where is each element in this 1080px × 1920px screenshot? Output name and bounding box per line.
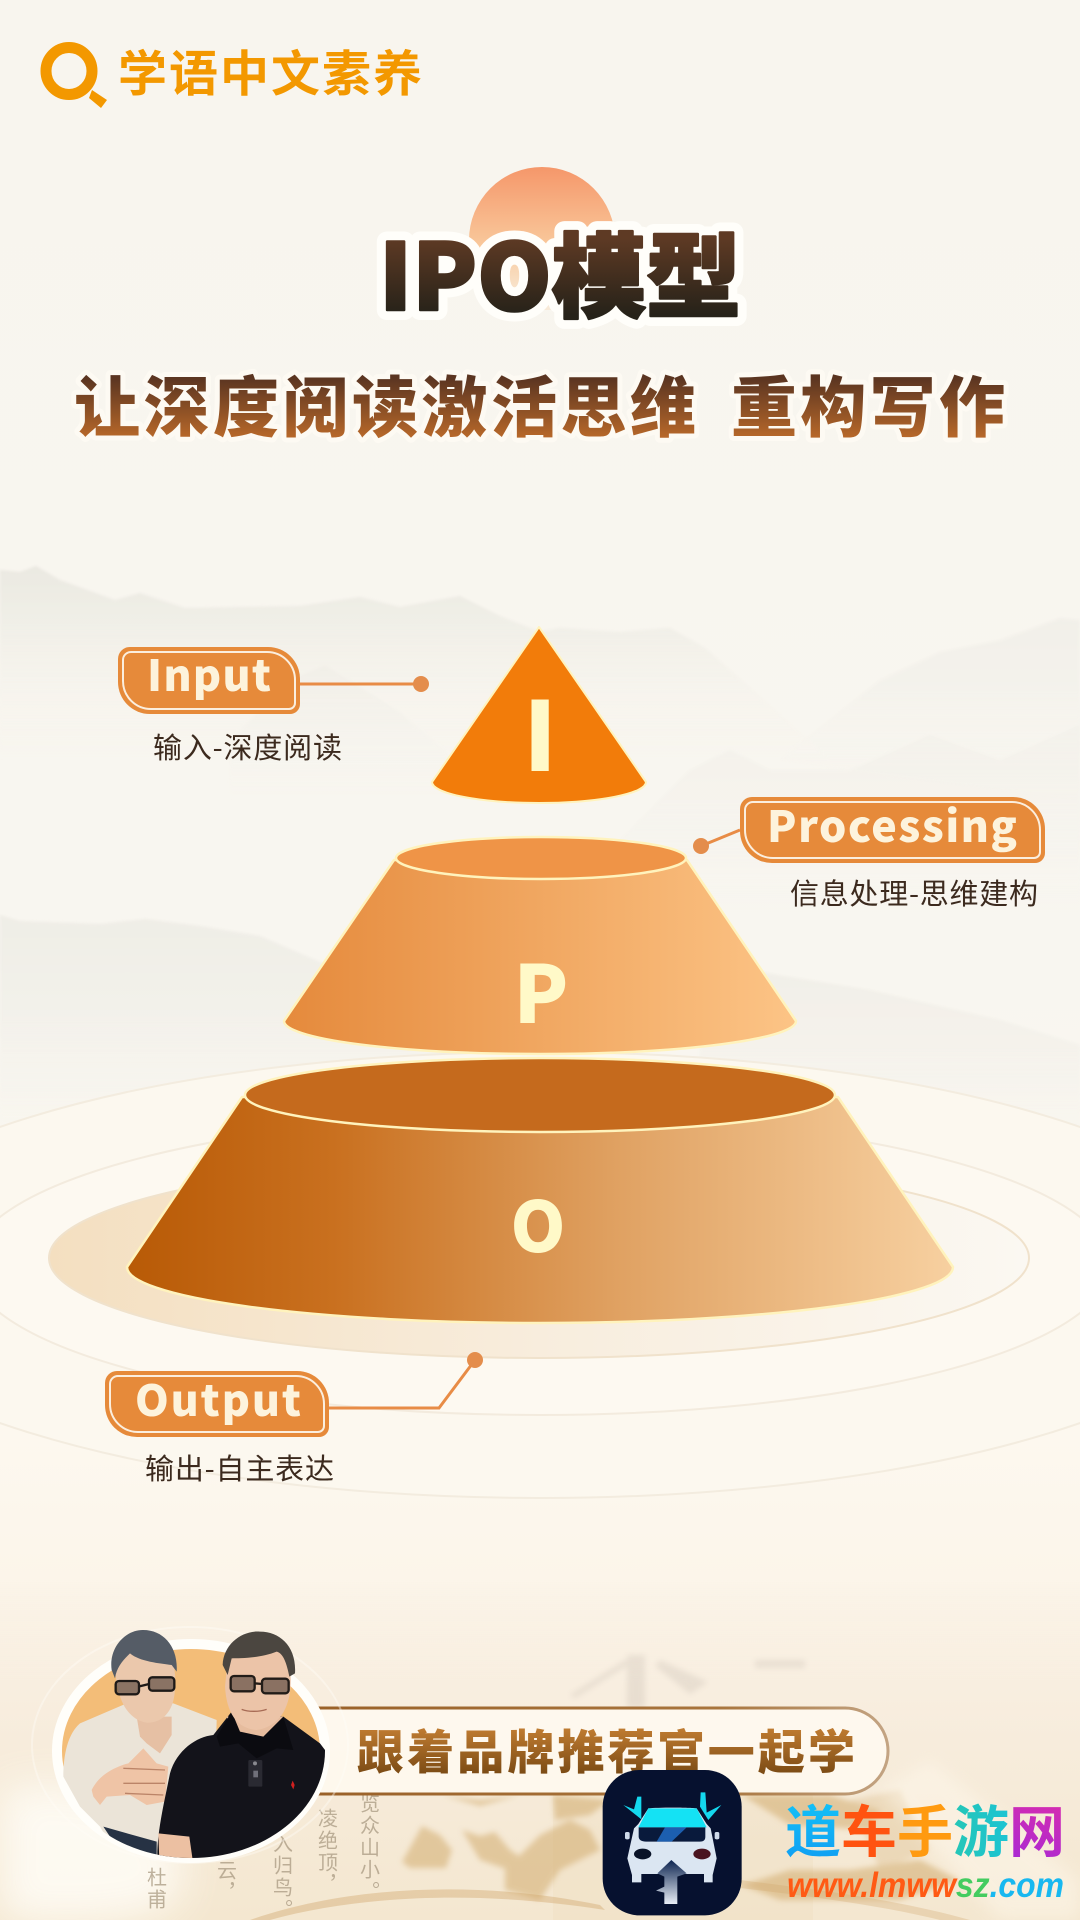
- callout: Processing: 信息处理-思维建构: [790, 871, 1038, 913]
- site watermark: 道车手游网: [785, 1788, 1065, 1869]
- callout: Output: Output: [135, 1367, 301, 1429]
- callout: Processing: Processing: [767, 793, 1017, 855]
- layer P: processing frustum: [284, 837, 796, 1054]
- poem lines: 云，: [212, 1860, 242, 1904]
- background ink mountains: [0, 566, 1080, 1180]
- layer P: processing frustum: P: [514, 931, 568, 1047]
- icon: magnifier: [46, 48, 107, 108]
- base disc: [49, 1158, 1029, 1358]
- poem lines: [142, 1793, 384, 1920]
- site watermark: [785, 1788, 1065, 1905]
- layer I: input cone: [432, 627, 646, 803]
- ripple rings around pyramid base: [0, 1052, 1080, 1498]
- poem lines: 杜甫: [142, 1867, 172, 1911]
- logo: [46, 35, 422, 108]
- bottom painting background: [0, 1580, 1080, 1920]
- layer I: input cone: I: [523, 660, 557, 799]
- arrow up: [656, 1860, 687, 1904]
- title: IPO模型: [379, 204, 741, 337]
- arrows down: [623, 1797, 641, 1819]
- subtitle: [74, 355, 1005, 451]
- callout: Processing: [693, 793, 1045, 913]
- callout: Input: Input: [147, 642, 271, 704]
- layer O: output frustum: O: [510, 1172, 566, 1273]
- pyramid: [127, 627, 953, 1323]
- layer O: output frustum: [127, 1058, 953, 1323]
- right man: [157, 1632, 326, 1860]
- tan landscape: [402, 1790, 960, 1900]
- poem lines: 入归鸟。: [268, 1833, 298, 1920]
- icon: setting sun: [469, 167, 615, 310]
- brand name: 学语中文素养: [118, 35, 422, 106]
- callout: Input: [118, 642, 429, 767]
- poem lines: 览众山小。: [356, 1793, 384, 1903]
- banner: recommendation: 跟着品牌推荐官一起学: [357, 1714, 855, 1783]
- banner: recommendation: [317, 1708, 888, 1794]
- icon: app car badge: [603, 1770, 742, 1915]
- callout: Output: 输出-自主表达: [145, 1446, 334, 1488]
- site watermark: www.lmwwsz.com: [787, 1866, 1064, 1905]
- car body: [627, 1808, 717, 1882]
- poem lines: 凌绝顶，: [314, 1808, 342, 1896]
- title: IPO模型: [379, 204, 741, 337]
- subtitle: 重构写作: [731, 355, 1005, 451]
- left man: [63, 1630, 217, 1860]
- subtitle: 让深度阅读激活思维: [74, 355, 696, 451]
- callout: Output: [105, 1352, 483, 1488]
- ghost calligraphy: [570, 1655, 805, 1708]
- portrait: two presenters: [32, 1627, 348, 1863]
- callout: Input: 输入-深度阅读: [153, 725, 342, 767]
